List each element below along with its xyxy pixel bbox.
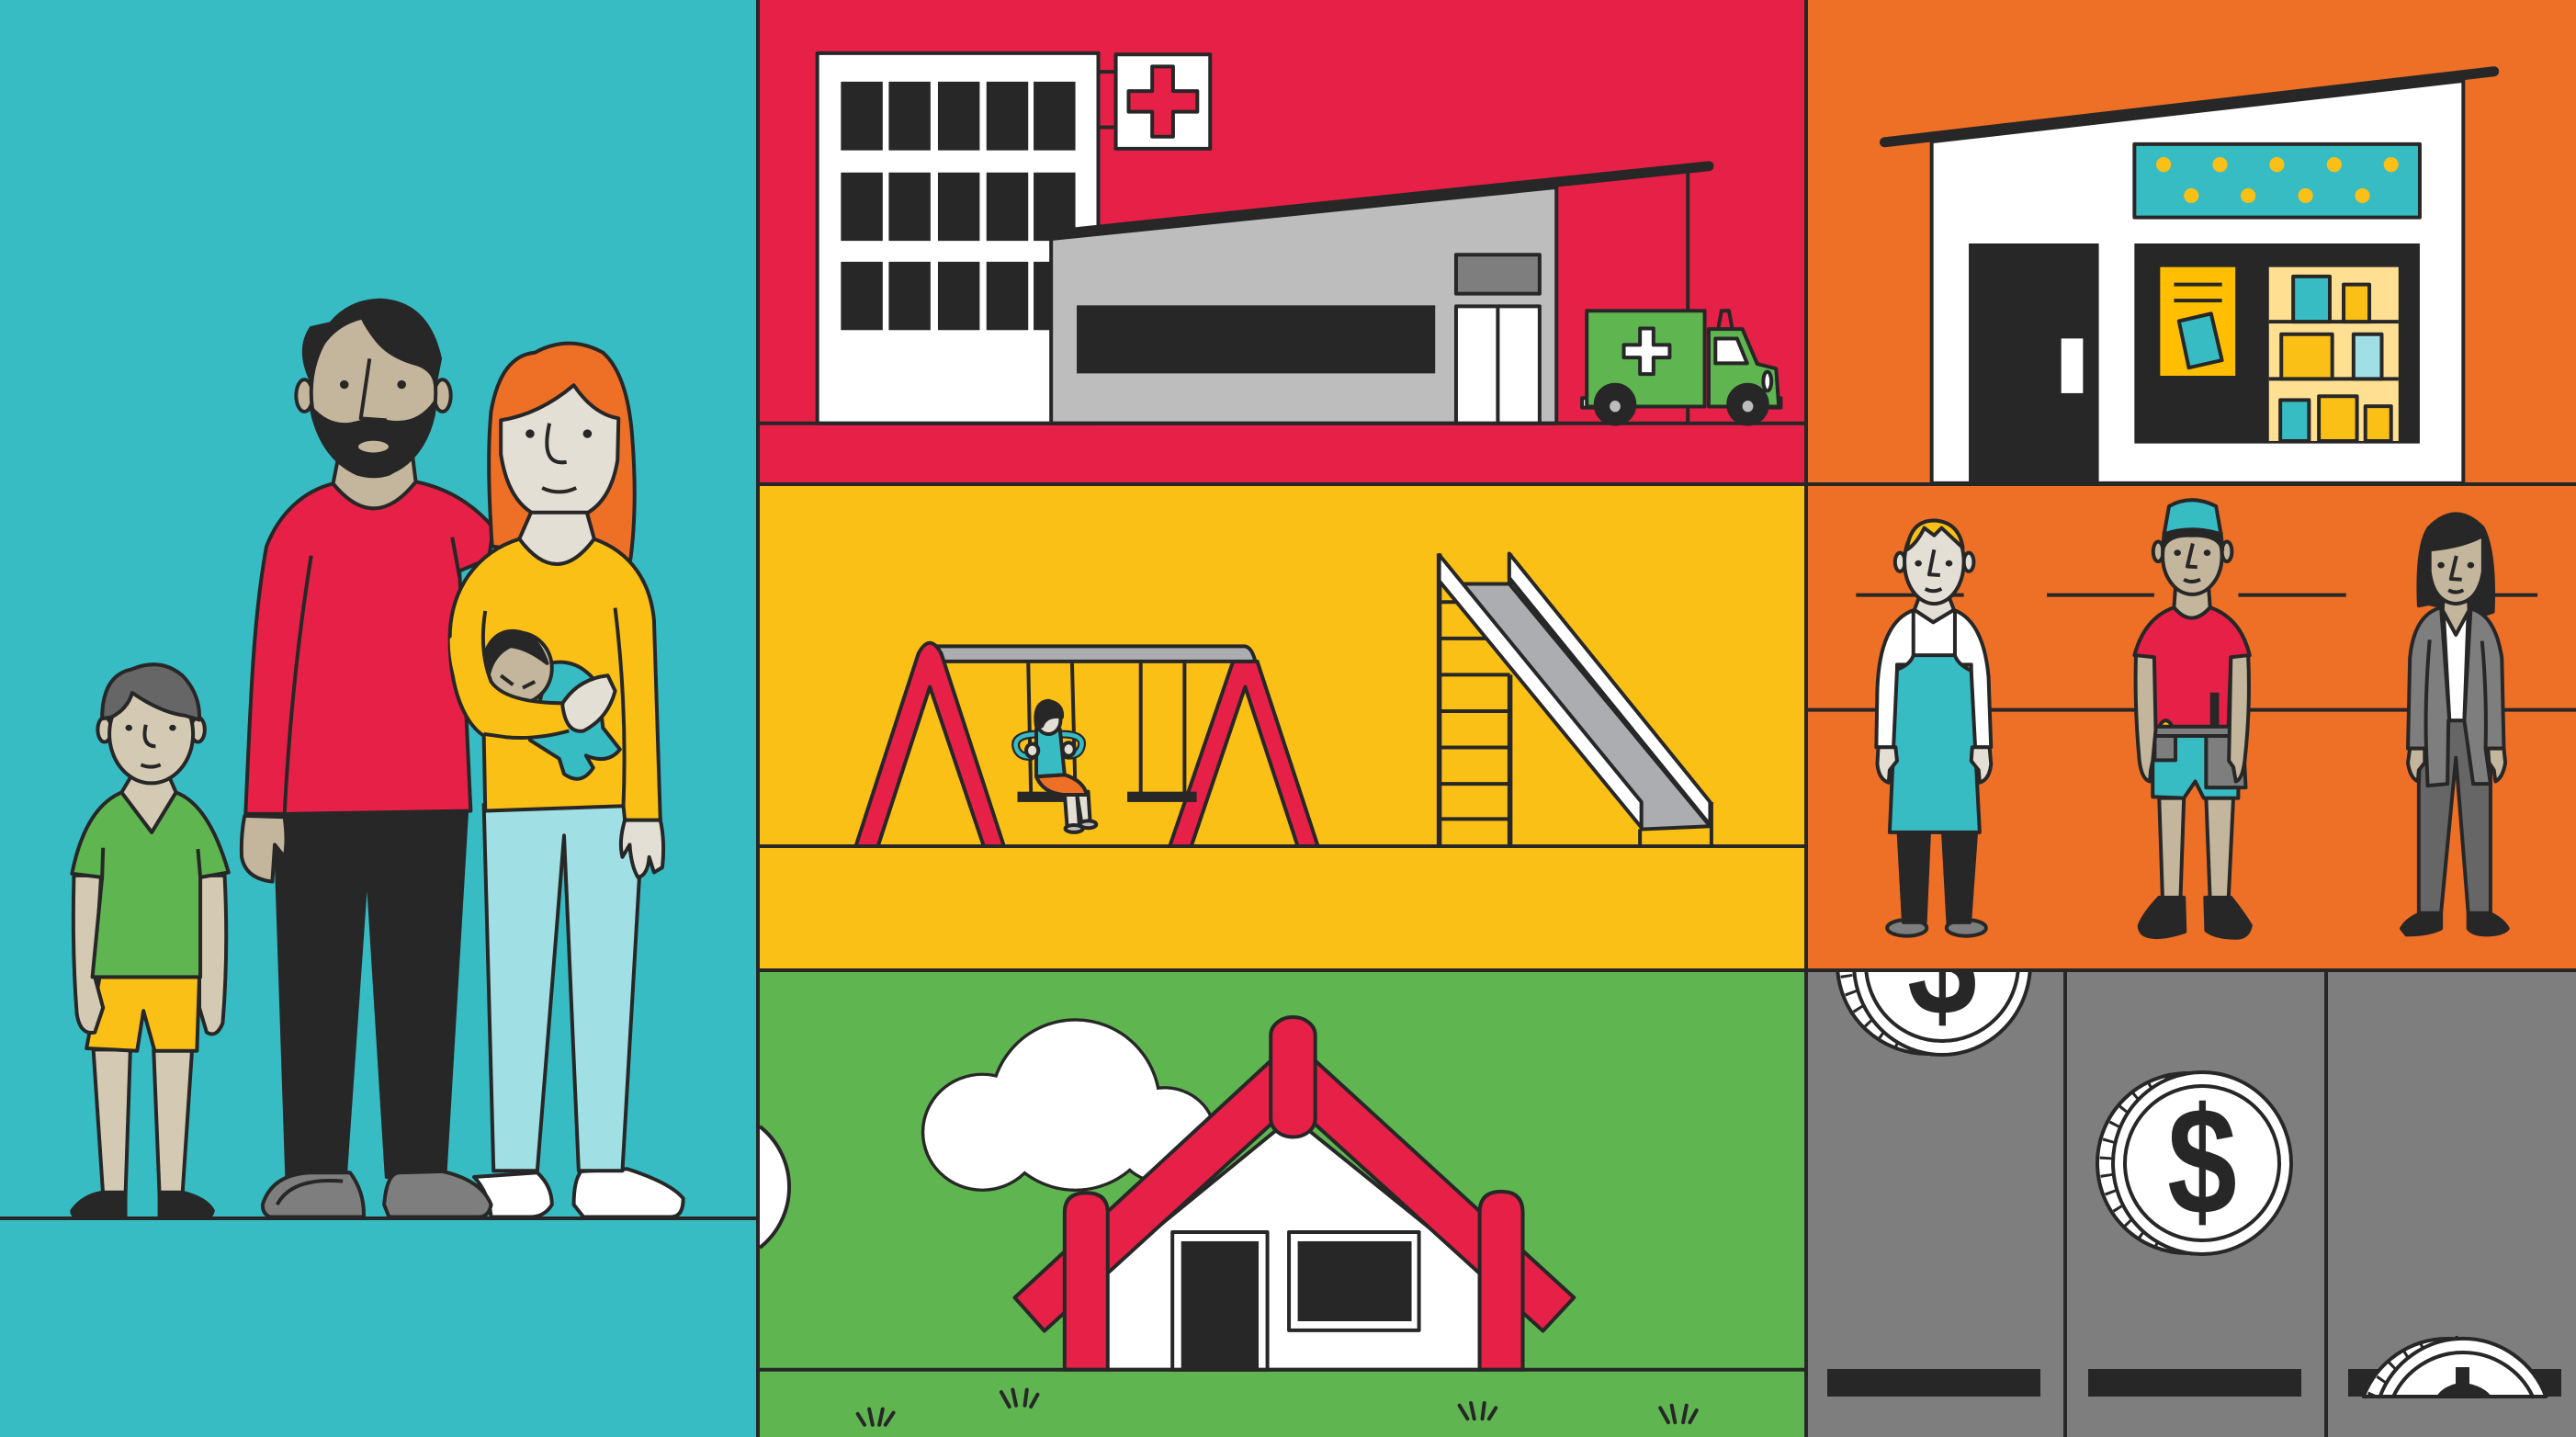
mother holding baby: [450, 344, 684, 1216]
hospital scene: [757, 53, 1806, 424]
family illustration: [72, 300, 684, 1216]
house: [1015, 1017, 1574, 1370]
slide: [1440, 554, 1712, 846]
clouds: [923, 1020, 1215, 1190]
coin: middle: [2097, 1072, 2291, 1254]
panel: marae background: [758, 970, 1806, 1437]
worker: apron: [1876, 520, 1991, 936]
partial cloud at left edge: [760, 1126, 789, 1248]
swing set: [855, 643, 1318, 846]
coin: middle: $: [2167, 1077, 2237, 1247]
money panel dividers: [2065, 970, 2326, 1437]
family ground line: [0, 1216, 758, 1220]
marae scene: [923, 1020, 1215, 1190]
low building: [1051, 166, 1709, 424]
grass tufts: [858, 1390, 1697, 1425]
ambulance: [1582, 311, 1780, 424]
father: [242, 300, 493, 1216]
hospital ground line: [757, 422, 1806, 425]
boy: [72, 664, 229, 1216]
shop scene: [1806, 72, 2576, 938]
coin slot 1: [1827, 1369, 2040, 1397]
worker: business woman: [2401, 514, 2508, 934]
marae ground line: [757, 1368, 1806, 1372]
worker: builder: [2134, 500, 2251, 938]
shop banner with dots: [2134, 144, 2420, 218]
playground ground line: [757, 844, 1806, 848]
shop window: [2134, 243, 2420, 444]
panel: shop background: [1806, 0, 2576, 970]
panel: playground background: [758, 484, 1806, 970]
father's front shoe: [384, 1171, 491, 1216]
coin: top, leaving frame: $: [1907, 877, 1977, 1047]
coin: top, leaving frame: [1836, 972, 2032, 1057]
child on swing: [1016, 701, 1096, 832]
playground scene: [757, 554, 1806, 846]
coin slot 2: [2088, 1369, 2301, 1397]
panel: family background: [0, 0, 758, 1437]
shop building: [1885, 72, 2494, 483]
coin slot 3: [2348, 1369, 2561, 1397]
hospital sign: [1099, 54, 1210, 149]
street background lines: [1806, 595, 2576, 710]
panel: money background: [1806, 970, 2576, 1437]
coin: entering slot: [2364, 1339, 2546, 1397]
panel: hospital background: [758, 0, 1806, 484]
hospital tower: [818, 53, 1099, 424]
